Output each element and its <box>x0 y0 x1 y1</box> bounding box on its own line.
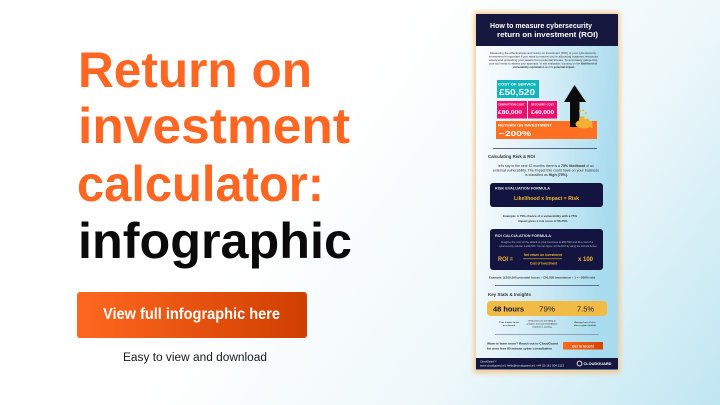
heading: Return on investment calculator: infographic: Return on <box>78 42 312 98</box>
return on investment tile <box>496 121 597 139</box>
intro paragraph: your tool needs to assess your approach. In risk evaluation, focusing on the likelihood of <box>489 62 597 66</box>
disruption cost tile: £80,000 <box>498 110 522 116</box>
card footer: CloudGuard™ <box>480 360 497 364</box>
card footer <box>476 358 618 370</box>
divider <box>495 284 599 287</box>
stat caption: 48 hours <box>499 321 519 327</box>
risk example: Example: A 75% chance of a vulnerability with a 75% <box>503 214 577 218</box>
divider <box>495 333 599 336</box>
risk evaluation formula panel <box>490 183 603 207</box>
button: view full infographic: View full infographic here <box>103 306 280 323</box>
contact call to action text: Want to learn more? Reach out to CloudGuard <box>487 342 558 346</box>
intro paragraph: investment is important if you want to ensure you're allocating business resources <box>489 54 599 58</box>
button: get in touch: Get in touch! <box>572 344 594 348</box>
ROI calculation formula panel: Net return on investment <box>524 253 563 257</box>
stat caption: 48 hours: on a breach <box>503 325 516 327</box>
card footer: www.cloudguard.ai | hello@cloudguard.ai | +44 (0) 161 504 2113 <box>480 364 565 368</box>
ROI calculation formula panel: ROI = <box>498 257 513 263</box>
key stats band: 48 hours <box>493 306 524 314</box>
card header <box>476 14 618 46</box>
button: view full infographic <box>77 292 307 338</box>
intro paragraph: vulnerability exploitation and its potential impact. <box>513 65 575 69</box>
risk example: impact gives a risk score of 56.25%. <box>518 219 568 223</box>
return on investment tile: RETURN ON INVESTMENT <box>498 124 553 128</box>
key stats band <box>487 301 607 316</box>
contact call to action text: for your free 90 minute cyber consultation <box>487 346 552 350</box>
disruption cost tile: DISRUPTION COST <box>498 104 525 106</box>
risk evaluation formula panel: Likelihood x Impact = Risk <box>514 196 580 202</box>
heading: Return on investment calculator: infographic: investment <box>78 98 350 154</box>
stat caption: 7.5%: after a cyber incident <box>574 324 596 327</box>
cost of service tile: £50,520 <box>499 87 535 97</box>
cost of service tile: COST OF SERVICE <box>498 82 537 86</box>
heading: key stats and insights: Key Stats & Insights <box>488 292 532 297</box>
ROI calculation formula panel: cybersecurity solution is £50,520. You can figure out the ROI by using the formula below. <box>499 245 597 248</box>
card header: return on investment (ROI) <box>497 30 599 39</box>
stat caption: 7.5%: Average loss of revs <box>574 321 596 324</box>
ROI calculation formula panel: ROI CALCULATION FORMULA <box>495 234 552 238</box>
ROI example: Example: (£100,000 potential losses ÷ £50,520 investment − 1 = −200%-ish) <box>489 276 595 280</box>
return on investment tile: −200% <box>499 129 531 138</box>
contact call to action text <box>487 342 558 350</box>
heading: calculating risk and ROI: Calculating Risk & ROI <box>488 154 535 159</box>
stat caption: 79%: incident is coming <box>532 326 552 328</box>
stat caption: 79%: prepare, test and remediation <box>527 322 558 326</box>
infographic preview card <box>474 12 620 373</box>
caption: easy to view and download: Easy to view and download <box>123 352 267 364</box>
ROI calculation formula panel: x 100 <box>578 257 594 263</box>
recovery cost tile <box>528 101 557 118</box>
stat caption: 79% <box>527 320 558 328</box>
ROI calculation formula panel: Cost of investment <box>530 262 558 266</box>
stat caption: 48 hours: Time it takes to act <box>499 321 519 324</box>
ROI calculation formula panel <box>490 229 603 270</box>
stat caption: 79%: Of businesses are likely to <box>528 320 556 322</box>
risk paragraph <box>493 164 599 177</box>
recovery cost tile: RECOVERY COST <box>531 102 554 106</box>
stat caption: 7.5% <box>574 321 596 327</box>
risk paragraph: is classified as High (75%). <box>525 173 568 177</box>
button: get in touch <box>563 342 603 350</box>
key stats band: 7.5% <box>577 306 594 314</box>
risk evaluation formula panel: RISK EVALUATION FORMULA <box>495 186 551 190</box>
intro paragraph: wisely and protecting your assets from potential threats. To accurately gauge this, <box>489 58 598 62</box>
icon: gold coins <box>576 110 593 128</box>
key stats band: 79% <box>539 306 555 314</box>
cost of service tile <box>497 80 539 98</box>
ROI calculation formula panel: Imagine the cost of the attack to your business is £50,520 and the cost of a <box>501 241 594 244</box>
risk example <box>503 214 577 223</box>
heading: Return on investment calculator: infographic: infographic <box>78 213 352 269</box>
recovery cost tile: £40,000 <box>531 110 554 116</box>
heading: Return on investment calculator: infographic <box>77 42 352 269</box>
card header: How to measure cybersecurity <box>490 21 593 30</box>
card footer: CLOUDGUARD <box>584 362 612 366</box>
divider <box>493 147 597 150</box>
intro paragraph <box>489 51 599 69</box>
heading: Return on investment calculator: infographic: calculator: <box>77 156 324 212</box>
risk paragraph: external vulnerability. The impact this could have on your business <box>493 168 599 172</box>
intro paragraph: Measuring the effectiveness and return on investment (ROI) of your cybersecurity <box>490 51 597 55</box>
risk paragraph: let's say in the next 12 months there is a 75% likelihood of an <box>498 164 594 168</box>
icon: black up arrow <box>564 85 586 127</box>
disruption cost tile <box>497 101 527 118</box>
